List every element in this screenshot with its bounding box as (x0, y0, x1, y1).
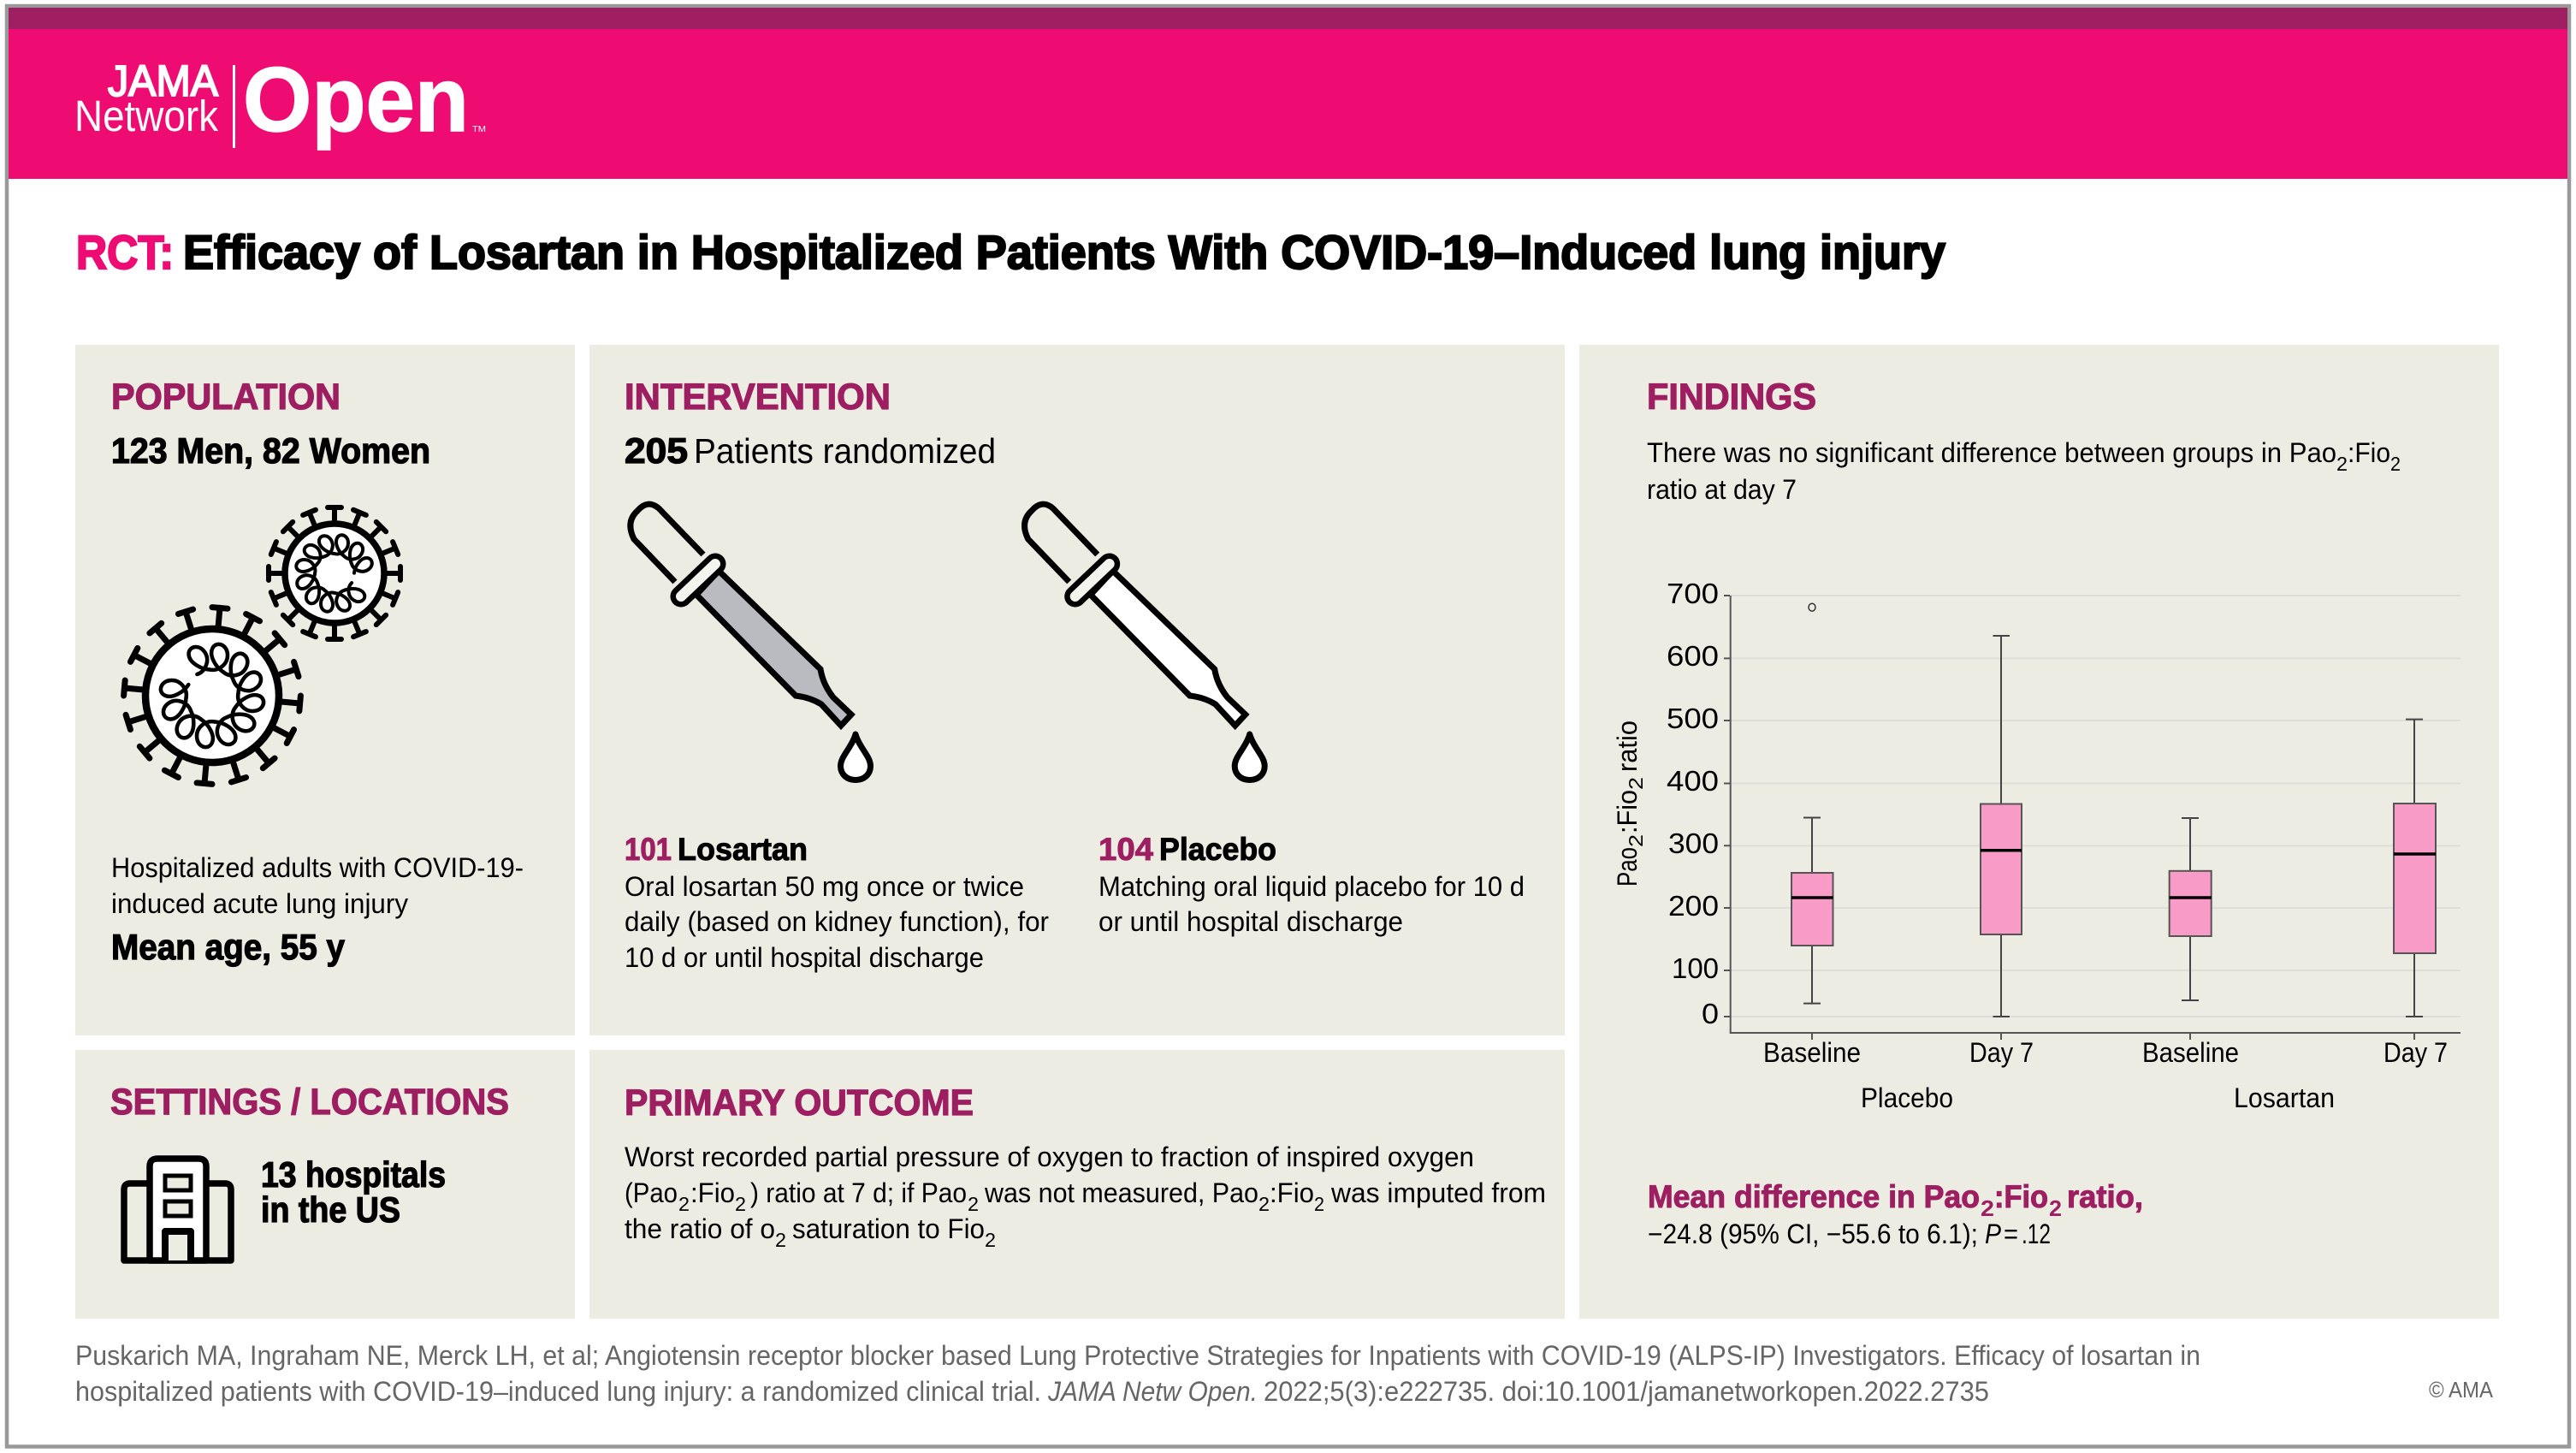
x axis labels: Baseline (2142, 1037, 2239, 1068)
panel: population (75, 345, 575, 1035)
y axis: 400 (1667, 765, 1719, 797)
panel: findings (1579, 345, 2499, 1319)
text: placebo arm: 104 (1099, 832, 1153, 867)
heading: intervention: INTERVENTION (625, 377, 891, 418)
text: mean difference result: :Fio (1994, 1179, 2048, 1214)
text: hospitals count: 13 hospitals (261, 1154, 446, 1195)
text: placebo arm: Matching oral liquid placebo for 10 d (1099, 871, 1525, 902)
heading: settings and locations: SETTINGS / LOCATIONS (110, 1082, 509, 1123)
citation: Puskarich MA, Ingraham NE, Merck LH, et al; Angiotensin receptor blocker based Lung Protective Strategies for Inpatients with COVID-19 (ALPS-IP) Investigators. Efficacy of losartan in (75, 1340, 2200, 1371)
text: primary outcome description: 2 (968, 1193, 979, 1215)
text: primary outcome description: was imputed from (1330, 1177, 1546, 1208)
y axis title: 2 (1625, 834, 1647, 847)
text: mean difference result: = (2004, 1219, 2018, 1249)
text: placebo arm (1099, 832, 1525, 937)
text: mean difference result: .12 (2022, 1219, 2051, 1249)
y axis title: :Fio (1612, 790, 1643, 833)
y axis: 700 (1667, 578, 1719, 609)
x axis labels: Placebo (1861, 1082, 1953, 1113)
text: primary outcome description: saturation to Fio (792, 1213, 985, 1244)
x axis labels: Day 7 (2384, 1037, 2448, 1068)
text: population description: induced acute lung injury (111, 888, 408, 919)
panel: intervention (589, 345, 1565, 1035)
text: losartan arm: 101 (625, 832, 672, 867)
text: primary outcome description: (Pao (625, 1177, 678, 1208)
y axis: 300 (1668, 827, 1719, 859)
text: findings summary: :Fio (2348, 437, 2390, 468)
text: losartan arm: Oral losartan 50 mg once or twice (625, 871, 1024, 902)
text: primary outcome description: 2 (775, 1229, 786, 1251)
text: patients randomized: 205 (625, 430, 688, 471)
text: primary outcome description: :Fio (1270, 1177, 1314, 1208)
text: mean difference result: 2 (2049, 1195, 2062, 1221)
box plot chart (1612, 578, 2461, 1113)
y axis title: ratio (1612, 721, 1643, 772)
box: placebo day 7 (1981, 636, 2022, 1017)
citation: JAMA Netw Open. (1047, 1376, 1258, 1407)
box: placebo baseline (1791, 603, 1833, 1004)
header banner (9, 8, 2567, 179)
title: RCT: (76, 225, 174, 279)
text: findings summary: 2 (2336, 453, 2348, 475)
logo: JAMA Network Open: TM (472, 125, 486, 134)
icon: hospital building (124, 1159, 231, 1260)
text: findings summary (1647, 437, 2401, 505)
x axis labels: Losartan (2234, 1082, 2335, 1113)
citation: hospitalized patients with COVID-19–induced lung injury: a randomized clinical trial. (75, 1376, 1041, 1407)
text: findings summary: ratio at day 7 (1647, 474, 1797, 505)
text: losartan arm: daily (based on kidney function), for (625, 906, 1049, 937)
text: findings summary: 2 (2390, 453, 2401, 475)
box: losartan day 7 (2394, 720, 2436, 1017)
y axis (1667, 578, 2461, 1040)
text: placebo arm: Placebo (1159, 832, 1276, 867)
heading: findings: FINDINGS (1647, 377, 1816, 418)
citation (75, 1340, 2200, 1407)
text: losartan arm: Losartan (678, 832, 808, 867)
text: primary outcome description: 2 (735, 1193, 746, 1215)
icon: small virus (269, 507, 400, 639)
logo: JAMA Network Open (74, 48, 486, 151)
text: population description (111, 852, 524, 919)
text: primary outcome description: 2 (1258, 1193, 1270, 1215)
y axis title (1612, 721, 1647, 887)
text: primary outcome description: 2 (985, 1229, 996, 1251)
heading: primary outcome: PRIMARY OUTCOME (625, 1082, 974, 1124)
text: mean difference result: ratio, (2067, 1179, 2143, 1214)
panel: primary outcome (589, 1050, 1565, 1319)
y axis: 0 (1702, 998, 1719, 1029)
text: placebo arm: or until hospital discharge (1099, 906, 1403, 937)
icon: losartan dropper (631, 504, 871, 780)
text: population description: Hospitalized adults with COVID-19- (111, 852, 524, 883)
text: primary outcome description: the ratio of o (625, 1213, 775, 1244)
heading: population: POPULATION (111, 377, 341, 418)
panel: settings and locations (75, 1050, 575, 1319)
text: losartan arm: 10 d or until hospital discharge (625, 942, 984, 973)
x axis labels: Baseline (1763, 1037, 1861, 1068)
y axis: 500 (1667, 703, 1719, 734)
y axis: 200 (1668, 890, 1719, 922)
text: primary outcome description: Worst recorded partial pressure of oxygen to fraction of inspired oxygen (625, 1142, 1474, 1172)
icon: placebo dropper (1025, 504, 1264, 780)
text: mean difference result: P (1985, 1219, 2002, 1249)
text: primary outcome description (625, 1142, 1546, 1251)
text: losartan arm (625, 832, 1049, 973)
text: primary outcome description: was not measured, Pao (984, 1177, 1258, 1208)
text: findings summary: There was no significant difference between groups in Pao (1647, 437, 2336, 468)
y axis title: 2 (1625, 777, 1647, 790)
text: primary outcome description: 2 (1314, 1193, 1324, 1215)
text: primary outcome description: 2 (678, 1193, 690, 1215)
text: mean difference result: 2 (1981, 1195, 1994, 1221)
y axis: 600 (1667, 640, 1719, 672)
y axis title: Pao (1612, 847, 1643, 887)
citation: 2022;5(3):e222735. doi:10.1001/jamanetworkopen.2022.2735 (1264, 1376, 1989, 1407)
text: mean difference result: Mean difference in Pao (1648, 1179, 1980, 1214)
text: mean difference result (1648, 1179, 2143, 1249)
text: mean age: Mean age, 55 y (111, 927, 346, 967)
copyright: © AMA (2429, 1377, 2494, 1403)
text: primary outcome description: :Fio (690, 1177, 735, 1208)
icon: large virus (116, 600, 308, 792)
box: losartan baseline (2170, 818, 2212, 1000)
title: Efficacy of Losartan in Hospitalized Patients With COVID-19–Induced lung injury (183, 225, 1945, 279)
text: hospitals count (261, 1154, 446, 1230)
text: men and women counts: 123 Men, 82 Women (111, 430, 430, 471)
x axis labels (1763, 1037, 2448, 1113)
text: mean difference result: −24.8 (95% CI, −55.6 to 6.1); (1648, 1219, 1978, 1249)
text: hospitals count: in the US (261, 1189, 400, 1230)
text: primary outcome description: ) ratio at 7 d; if Pao (750, 1177, 967, 1208)
y axis: 100 (1672, 952, 1719, 984)
x axis labels: Day 7 (1969, 1037, 2034, 1068)
logo: JAMA Network Open: JAMA (108, 56, 218, 105)
logo: JAMA Network Open: Open (243, 48, 469, 151)
text: patients randomized: Patients randomized (694, 431, 996, 471)
logo: JAMA Network Open: Network (74, 92, 218, 140)
